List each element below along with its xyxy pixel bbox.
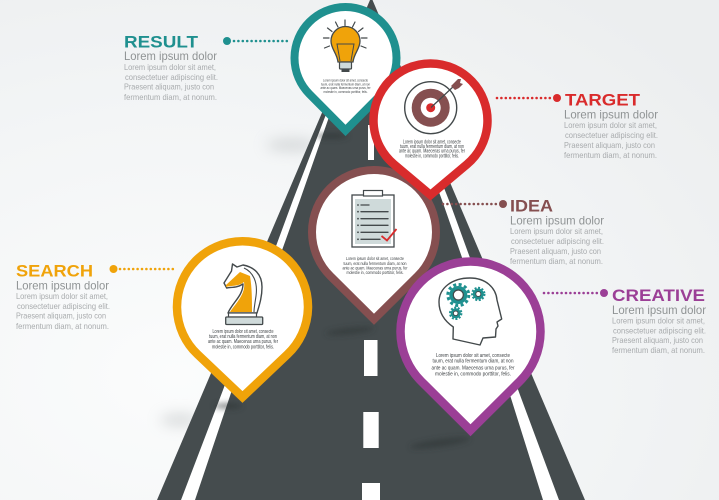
pin: idea (312, 170, 436, 319)
text block: idea: Lorem ipsum dolor sit amet, (510, 226, 603, 236)
text block: idea: Lorem ipsum dolor (510, 214, 604, 228)
icon: target with arrow (405, 79, 463, 134)
text block: idea: fermentum diam, at nonum. (510, 256, 603, 266)
text block: target: Praesent aliquam, justo con (564, 140, 655, 150)
pin: search (177, 241, 308, 397)
text block: search: fermentum diam, at nonum. (16, 321, 109, 331)
text block: search: Praesent aliquam, justo con (16, 310, 106, 320)
pin text: search (208, 329, 278, 350)
pin text: target: Lorem ipsum dolor sit amet, consecte (403, 140, 461, 146)
pin: creative (401, 262, 541, 430)
pin text: creative (432, 353, 515, 377)
icon: clipboard (352, 190, 396, 247)
pin text: creative: ante ac quam. Maecenas urna purus, fer (432, 365, 515, 371)
pin text: result: Lorem ipsum dolor sit amet, consecte (323, 78, 369, 82)
text block: result: Lorem ipsum dolor (124, 49, 217, 63)
text block: target: TARGET (565, 90, 641, 110)
connector: search (110, 265, 173, 273)
text block: search: Lorem ipsum dolor sit amet, (16, 291, 108, 301)
pin text: idea (342, 256, 408, 276)
gear medium (472, 288, 484, 300)
text block: result: fermentum diam, at nonum. (124, 92, 217, 102)
road left edge line (181, 60, 352, 500)
connector: result (223, 37, 287, 45)
text block: creative: Lorem ipsum dolor sit amet, (612, 316, 705, 326)
pin text: creative: tuum, erat nulla fermentum diam, at non (432, 359, 514, 365)
text block: result: RESULT (124, 32, 199, 52)
pin text: result: ante ac quam. Maecenas urna purus, fer (320, 85, 371, 90)
text block: search: consectetuer adipiscing elit. (17, 301, 110, 311)
pin text: target (399, 140, 465, 160)
text block: result: Lorem ipsum dolor sit amet, (124, 62, 216, 72)
icon: chess knight (224, 264, 263, 324)
text block: idea: Praesent aliquam, justo con (510, 246, 601, 256)
road centre dashes (362, 125, 380, 500)
pin text: idea: tuum, erat nulla fermentum diam, at non (344, 261, 407, 267)
text block: target: consectetuer adipiscing elit. (565, 130, 658, 140)
pin text: search: Lorem ipsum dolor sit amet, consecte (212, 329, 274, 335)
pin text: target: tuum, erat nulla fermentum diam, at non (400, 144, 464, 150)
text block: creative: consectetuer adipiscing elit. (613, 326, 706, 336)
pin text: creative: Lorem ipsum dolor sit amet, consecte (436, 353, 510, 359)
pin text: search: tuum, erat nulla fermentum diam, at non (209, 334, 277, 340)
road right edge line (420, 140, 559, 500)
pin text: idea: ante ac quam. Maecenas urna purus, fer (342, 266, 408, 272)
pin text: target: molestie in, commodo porttitor, felis. (405, 154, 459, 160)
text block: target: Lorem ipsum dolor sit amet, (564, 120, 657, 130)
text block: idea (510, 196, 604, 266)
text block: result: consectetuer adipiscing elit. (125, 72, 218, 82)
icon: head with gears (439, 278, 502, 345)
text block: search: SEARCH (16, 262, 93, 280)
pin text: idea: molestie in, commodo porttitor, felis. (346, 270, 404, 276)
text block: creative: Praesent aliquam, justo con (612, 335, 703, 345)
pin text: result: tuum, erat nulla fermentum diam, at non (321, 82, 370, 86)
pin text: result (320, 78, 371, 94)
pin text: search: molestie in, commodo porttitor, felis. (212, 344, 274, 350)
pin shadows on road (214, 133, 470, 451)
pin text: result: molestie in, commodo porttitor, felis. (324, 89, 368, 94)
road (157, 0, 585, 500)
text block: creative: Lorem ipsum dolor (612, 303, 706, 317)
text block: creative: CREATIVE (612, 286, 705, 305)
text block: target: fermentum diam, at nonum. (564, 150, 657, 160)
pin text: idea: Lorem ipsum dolor sit amet, consecte (346, 256, 404, 262)
text block: search (16, 262, 110, 331)
pin: target (374, 63, 488, 195)
text block: result: Praesent aliquam, justo con (124, 82, 214, 92)
connector: creative (544, 289, 608, 297)
text block: idea: consectetuer adipiscing elit. (511, 236, 604, 246)
connector: idea (443, 200, 507, 208)
pin text: target: ante ac quam. Maecenas urna purus, fer (399, 148, 465, 154)
text block: target (564, 90, 658, 160)
pin: result (294, 7, 397, 130)
text block: creative: fermentum diam, at nonum. (612, 345, 705, 355)
text block: result (124, 32, 218, 102)
connector: target (497, 94, 561, 102)
pin text: creative: molestie in, commodo porttitor, felis. (435, 371, 511, 377)
text block: search: Lorem ipsum dolor (16, 278, 109, 292)
text block: target: Lorem ipsum dolor (564, 108, 658, 122)
ground shadows (160, 139, 318, 426)
pin text: search: ante ac quam. Maecenas urna purus, fer (208, 339, 278, 345)
text block: idea: IDEA (510, 196, 553, 216)
gear large (448, 284, 469, 306)
icon: light bulb (324, 20, 367, 72)
gear small (450, 308, 461, 319)
text block: creative (612, 286, 706, 355)
